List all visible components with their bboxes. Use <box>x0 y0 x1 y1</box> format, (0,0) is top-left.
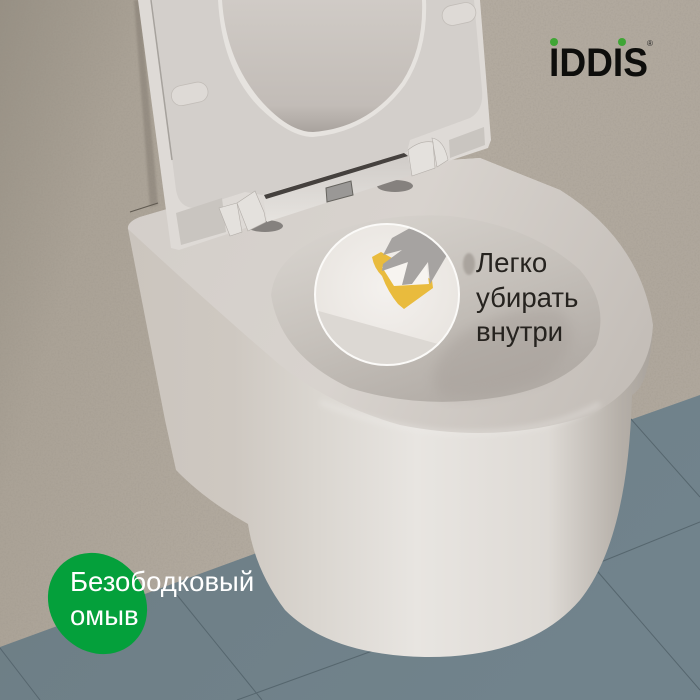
lid: left hinge block <box>219 191 266 236</box>
text block: easy to clean inside: Легко <box>476 247 547 278</box>
lid: inner recess <box>152 0 482 208</box>
lid: hinge shadow <box>264 153 408 199</box>
toilet body <box>128 158 653 657</box>
hinge: left chrome post <box>247 220 283 232</box>
body: flush outlet <box>463 253 475 275</box>
lens: glove <box>382 228 447 285</box>
body: ceramic shell <box>128 158 653 657</box>
text block: easy to clean inside <box>476 247 578 347</box>
body: bowl opening <box>271 215 600 402</box>
lid: hinge bar <box>263 153 412 222</box>
logo: green dots <box>550 38 626 46</box>
lid: lower right pocket <box>449 127 485 158</box>
lid: left bumper <box>170 80 210 108</box>
badge: label: омыв <box>70 600 139 631</box>
badge: label <box>70 566 254 631</box>
text block: easy to clean inside: убирать <box>476 282 578 313</box>
lid: outer shell <box>138 0 491 250</box>
lid: seat ring <box>218 0 426 137</box>
badge: rimless flush <box>27 533 254 674</box>
lid: right bumper <box>440 1 478 27</box>
seat lid <box>138 0 491 250</box>
text block: easy to clean inside: внутри <box>476 316 563 347</box>
hinge: right chrome post <box>377 180 413 192</box>
logo: IDDIS: IDDIS <box>549 41 648 85</box>
lid: chrome button <box>326 181 353 202</box>
body: rim top surface <box>128 158 653 433</box>
callout: magnified cleaning lens <box>315 224 460 370</box>
body: inner bowl shadow <box>433 308 571 397</box>
badge: green blob <box>27 533 168 674</box>
badge: label: Безободковый <box>70 566 254 597</box>
lens: photo background <box>315 224 460 370</box>
lid: left inner edge <box>151 0 172 160</box>
lens: sponge <box>372 252 433 309</box>
logo: IDDIS: ® <box>647 39 653 48</box>
lid: right hinge block <box>408 138 448 176</box>
lid: seat hole <box>222 0 422 132</box>
lens: white ring <box>315 224 459 365</box>
lid: lower left pocket <box>176 198 226 245</box>
body: rim highlight <box>320 402 600 433</box>
background: tiled floor <box>0 395 700 700</box>
